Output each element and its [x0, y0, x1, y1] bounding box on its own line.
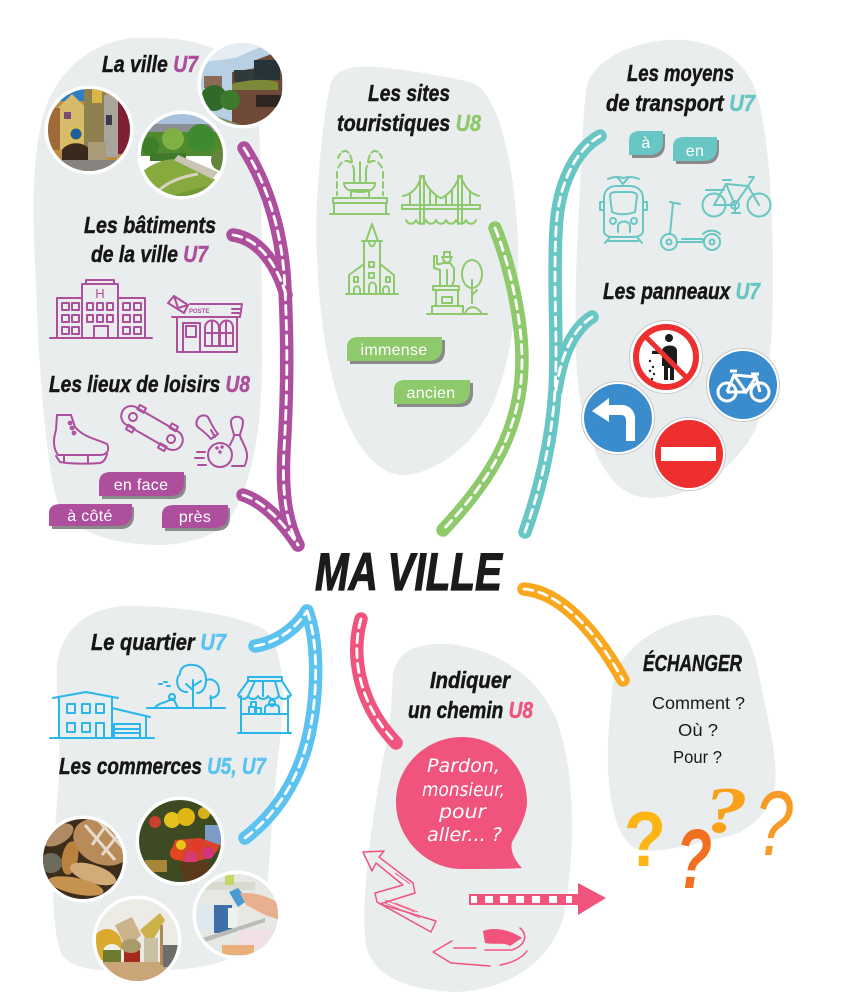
- panel: transport et panneaux: [575, 40, 780, 498]
- heading: les bâtiments de la ville: Les bâtiments: [84, 212, 216, 238]
- tag: à: à: [641, 135, 651, 152]
- panel: indiquer un chemin: [363, 644, 606, 992]
- speech bubble: Pardon,: [427, 755, 500, 777]
- icon: points d'interrogation: ?: [755, 773, 793, 875]
- tag: près: [162, 505, 230, 531]
- icon: points d'interrogation: ?: [704, 774, 748, 847]
- heading: les sites touristiques: Les sites: [368, 80, 450, 106]
- icon: points d'interrogation: ?: [676, 812, 712, 906]
- heading: les bâtiments de la ville: de la ville U7: [91, 241, 209, 267]
- tag: en: en: [686, 143, 704, 160]
- heading: les moyens de transport: de transport U7: [606, 90, 756, 116]
- icon: maison: [50, 692, 154, 738]
- tag: à côté: à côté: [67, 508, 113, 525]
- icon: parc: [147, 665, 225, 708]
- icon: poste: [168, 296, 242, 352]
- heading: les bâtiments de la ville: [84, 212, 216, 267]
- heading: le quartier: Le quartier U7: [91, 629, 227, 655]
- road: violet: [233, 148, 298, 545]
- heading: la ville: La ville U7: [102, 51, 199, 77]
- icon: vélo: [702, 177, 770, 216]
- photo: fleuriste: [136, 796, 224, 886]
- icon: fontaine: [330, 151, 389, 214]
- tag: près: près: [179, 509, 211, 526]
- road: rose: [357, 619, 396, 743]
- text: questions: Comment ?: [652, 693, 745, 713]
- photo: épicerie: [92, 896, 183, 984]
- icon: statue: [427, 252, 487, 314]
- heading: indiquer un chemin: [408, 667, 534, 723]
- sign: tourner à gauche: [582, 382, 654, 454]
- icon: trottinette: [661, 202, 720, 250]
- icon: skateboard: [116, 399, 188, 457]
- sign: sens interdit: [652, 418, 726, 490]
- icon: hôtel: [50, 280, 152, 338]
- heading: les moyens de transport: [606, 60, 756, 116]
- photo: pharmacie: [192, 870, 282, 960]
- tag: immense: immense: [360, 342, 428, 359]
- icon: église: [346, 224, 398, 294]
- speech bubble: [396, 737, 527, 869]
- photo: gros horloge: [44, 85, 135, 175]
- heading: les lieux de loisirs: Les lieux de loisirs U8: [49, 371, 251, 397]
- heading: les sites touristiques: touristiques U8: [337, 110, 482, 136]
- panel: les sites touristiques: [316, 66, 518, 475]
- text: questions: Où ?: [678, 720, 718, 740]
- speech bubble: monsieur,: [422, 779, 505, 801]
- photo: boulangerie: [43, 816, 126, 902]
- icon: patin à glace: [54, 415, 108, 464]
- tag: à côté: [49, 504, 134, 529]
- sign: interdit de jeter: [630, 320, 702, 394]
- heading: indiquer un chemin: Indiquer: [430, 667, 512, 693]
- speech bubble: aller... ?: [427, 824, 502, 846]
- arrow: demi-tour: [433, 928, 527, 966]
- arrow: zigzag: [363, 851, 436, 932]
- icon: étal: [238, 677, 291, 733]
- title: MA VILLE: [315, 543, 503, 602]
- icon: pont: [402, 176, 480, 224]
- icon: tramway: [600, 177, 647, 243]
- heading: les commerces: Les commerces U5, U7: [59, 753, 267, 779]
- road: turquoise: [525, 136, 600, 532]
- text: questions: Pour ?: [673, 747, 722, 767]
- heading: les moyens de transport: Les moyens: [627, 60, 734, 86]
- tag: en: [673, 137, 719, 164]
- sign: piste cyclable: [706, 348, 780, 422]
- icon: hôtel: H: [95, 286, 105, 301]
- panel: échanger: [608, 615, 793, 906]
- heading: les panneaux: Les panneaux U7: [603, 278, 761, 304]
- panel: quartier et commerces: [39, 606, 291, 984]
- tag: ancien: [394, 380, 473, 407]
- icon: poste: POSTE: [189, 309, 209, 315]
- tag: immense: [347, 337, 445, 364]
- tag: en face: [99, 472, 186, 499]
- road: orange: [524, 589, 623, 680]
- speech bubble: pour: [438, 801, 487, 823]
- photo: parc: [138, 110, 233, 200]
- heading: échanger: ÉCHANGER: [643, 649, 742, 676]
- icon: points d'interrogation: ?: [624, 795, 666, 883]
- panel: la ville, bâtiments, loisirs: [33, 38, 288, 545]
- heading: indiquer un chemin: un chemin U8: [408, 697, 534, 723]
- arrow: en pointillés vers la droite: [469, 883, 606, 915]
- road: bleu clair: [245, 611, 316, 838]
- tag: à: [629, 131, 665, 158]
- icon: bowling: [195, 415, 247, 467]
- icon: points d'interrogation: [624, 773, 793, 906]
- photo: immeubles modernes: [198, 43, 283, 128]
- tag: en face: en face: [114, 477, 168, 494]
- road: vert: [443, 228, 522, 530]
- heading: les sites touristiques: [337, 80, 482, 136]
- text: questions: [652, 693, 745, 767]
- tag: ancien: ancien: [407, 385, 455, 402]
